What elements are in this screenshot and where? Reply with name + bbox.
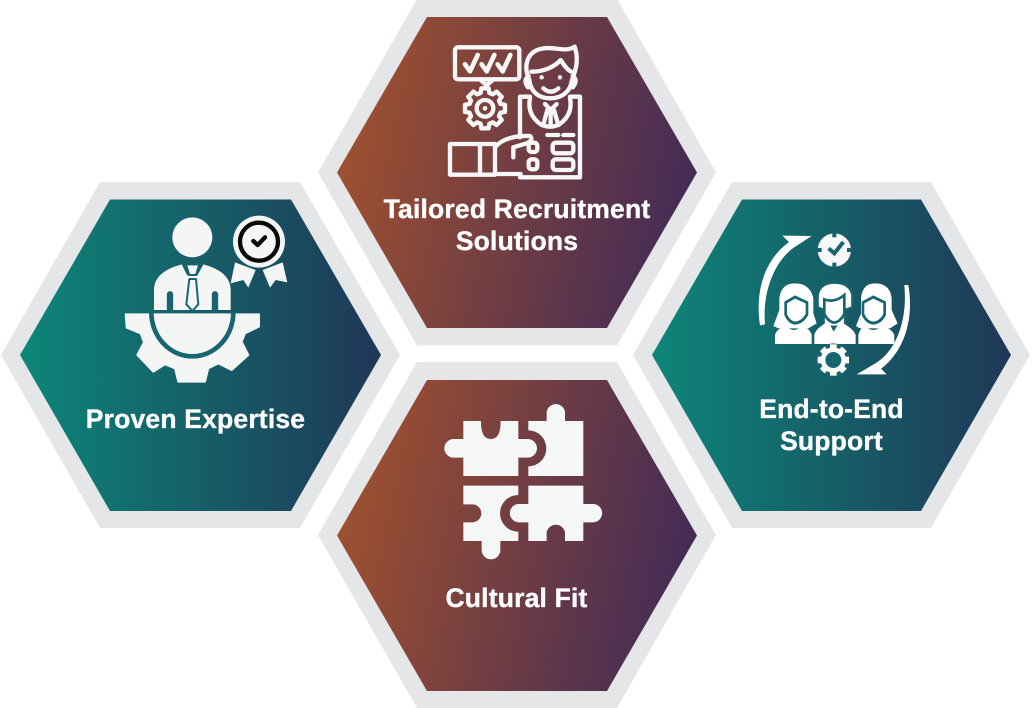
heading: Support [780,426,883,456]
heading: Cultural Fit [445,583,588,613]
icon: recruiter with checklist, gear and handheld profile [450,47,580,177]
heading: Proven Expertise [86,404,305,434]
icon: four puzzle pieces [444,404,602,559]
panel: cultural fit [318,362,716,708]
heading: Tailored Recruitment [384,194,650,224]
panel: end-to-end support [633,182,1030,528]
panel: tailored recruitment solutions [318,0,716,346]
heading: Solutions [456,226,578,256]
panel: proven expertise [1,182,400,528]
icon: expert on gear with award badge [126,216,287,382]
heading: End-to-End [759,394,904,424]
icon: team with clock, gear and cycle arrows [759,233,910,377]
